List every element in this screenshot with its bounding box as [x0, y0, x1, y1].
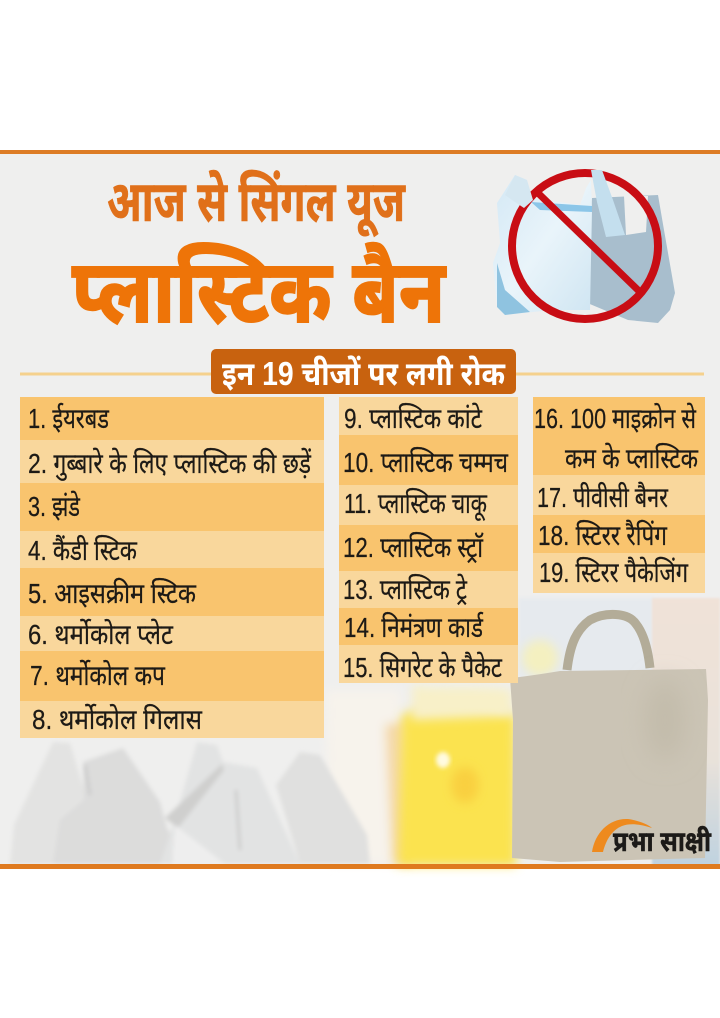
photo: yellow bag	[398, 684, 516, 866]
panel: poster background	[0, 154, 720, 864]
bottom border	[0, 864, 720, 869]
panel: list column 2: 14. निमंत्रण कार्ड	[344, 611, 484, 643]
photo: plastic and cloth bags	[10, 598, 720, 866]
panel: list column 2: 15. सिगरेट के पैकेट	[343, 651, 503, 683]
sub-heading pill: इन 19 चीजों पर लगी रोक	[222, 355, 506, 392]
photo: white plastic bags	[10, 742, 370, 864]
panel: list column 2: 9. प्लास्टिक कांटे	[344, 402, 483, 434]
icon: prohibition sign	[512, 173, 658, 319]
panel: list column 3: 18. स्टिरर रैपिंग	[538, 519, 668, 551]
icon: grey back bag	[585, 195, 675, 323]
panel: list column 1: 1. ईयरबड	[28, 402, 110, 434]
photo: cloth tote bag	[510, 614, 708, 862]
icon: banned plastic bag	[493, 170, 675, 323]
icon: bag handles over sign	[591, 170, 625, 237]
panel: list column 1	[20, 397, 324, 738]
panel: list column 1: 4. कैंडी स्टिक	[28, 534, 137, 566]
panel: list column 1: 5. आइसक्रीम स्टिक	[28, 577, 196, 609]
panel: list column 2: 12. प्लास्टिक स्ट्रॉ	[343, 531, 484, 564]
panel: list column 1: 7. थर्मोकोल कप	[30, 659, 166, 691]
panel: list column 1: 2. गुब्बारे के लिए प्लास्टिक की छड़ें	[28, 447, 312, 481]
divider lines	[20, 372, 704, 376]
panel: list column 2: 11. प्लास्टिक चाकू	[344, 487, 487, 521]
top border	[0, 150, 720, 154]
photo: pale translucent bags	[326, 690, 412, 864]
title line 2: प्लास्टिक बैन	[72, 242, 447, 341]
panel: list column 1: 8. थर्मोकोल गिलास	[32, 703, 203, 735]
panel: list column 3: 17. पीवीसी बैनर	[537, 481, 668, 513]
panel: list column 2: 10. प्लास्टिक चम्मच	[343, 446, 509, 478]
icon: blue front bag	[493, 175, 592, 315]
panel: list column 2: 13. प्लास्टिक ट्रे	[343, 573, 468, 606]
panel: list column 2	[339, 397, 518, 683]
panel: list column 1: 6. थर्मोकोल प्लेट	[28, 618, 174, 650]
title line 1: आज से सिंगल यूज	[107, 169, 406, 238]
logo: Prabha Sakshi	[592, 819, 712, 857]
panel: list column 3	[533, 397, 705, 593]
panel: list column 1: 3. झंडे	[28, 490, 81, 522]
